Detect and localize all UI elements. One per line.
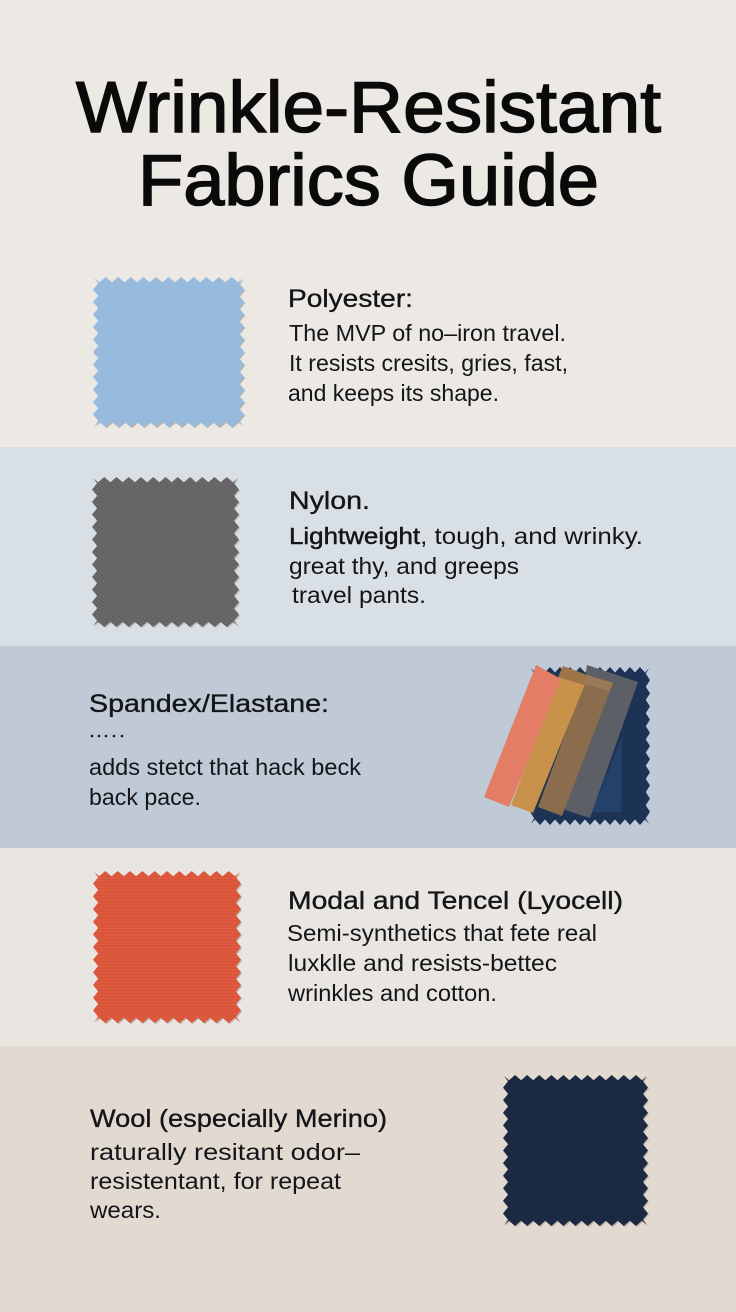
panel: polyester (93, 277, 568, 428)
panel: modal and tencel (0, 848, 736, 1046)
text: nylon description (289, 523, 643, 608)
text: nylon description: travel pants. (292, 582, 426, 608)
text: polyester description: The MVP of no–iron travel. (289, 320, 566, 346)
text: wool description: resistentant, for repeat (90, 1168, 342, 1194)
icon: red fabric swatch (93, 871, 242, 1024)
title: Wrinkle-Resistant (76, 68, 661, 148)
heading: polyester: Polyester: (288, 285, 413, 313)
text: modal description: Semi-synthetics that fete real (287, 920, 597, 946)
background band: title and polyester (0, 0, 736, 447)
panel: wool (0, 1046, 736, 1312)
dotted separator (91, 735, 123, 737)
text: polyester description: and keeps its shape. (288, 380, 499, 406)
text: modal description: luxklle and resists-bettec (288, 950, 557, 976)
panel: spandex/elastane (0, 646, 736, 848)
spandex band (0, 646, 736, 848)
heading: spandex/elastane: Spandex/Elastane: (89, 690, 329, 718)
title (76, 68, 661, 221)
heading: modal and tencel: Modal and Tencel (Lyocell) (288, 887, 623, 915)
panel: nylon (0, 447, 736, 646)
text: modal description: wrinkles and cotton. (287, 980, 497, 1006)
modal band (0, 848, 736, 1046)
text: wool description: wears. (89, 1197, 161, 1223)
text: polyester description: It resists cresits, gries, fast, (289, 350, 568, 376)
text: spandex description: adds stetct that hack beck (89, 754, 361, 780)
title: Fabrics Guide (138, 141, 599, 221)
text: polyester description (288, 320, 568, 406)
icon: navy fabric swatch (503, 1075, 649, 1227)
heading: wool: Wool (especially Merino) (90, 1105, 387, 1133)
wool band (0, 1046, 736, 1312)
text: nylon description: Lightweight , tough, and wrinky. (289, 523, 643, 549)
text: wool description (89, 1139, 360, 1223)
icon: light blue fabric swatch (93, 277, 245, 428)
text: spandex description (89, 754, 361, 810)
text: nylon description: great thy, and greeps (289, 553, 519, 579)
text: wool description: raturally resitant odor– (90, 1139, 360, 1165)
nylon band (0, 447, 736, 646)
icon: grey fabric swatch (92, 477, 240, 628)
text: spandex description: back pace. (89, 784, 201, 810)
icon: fanned fabric strips (484, 665, 650, 825)
text: modal description (287, 920, 597, 1006)
heading: nylon: Nylon. (289, 487, 370, 515)
